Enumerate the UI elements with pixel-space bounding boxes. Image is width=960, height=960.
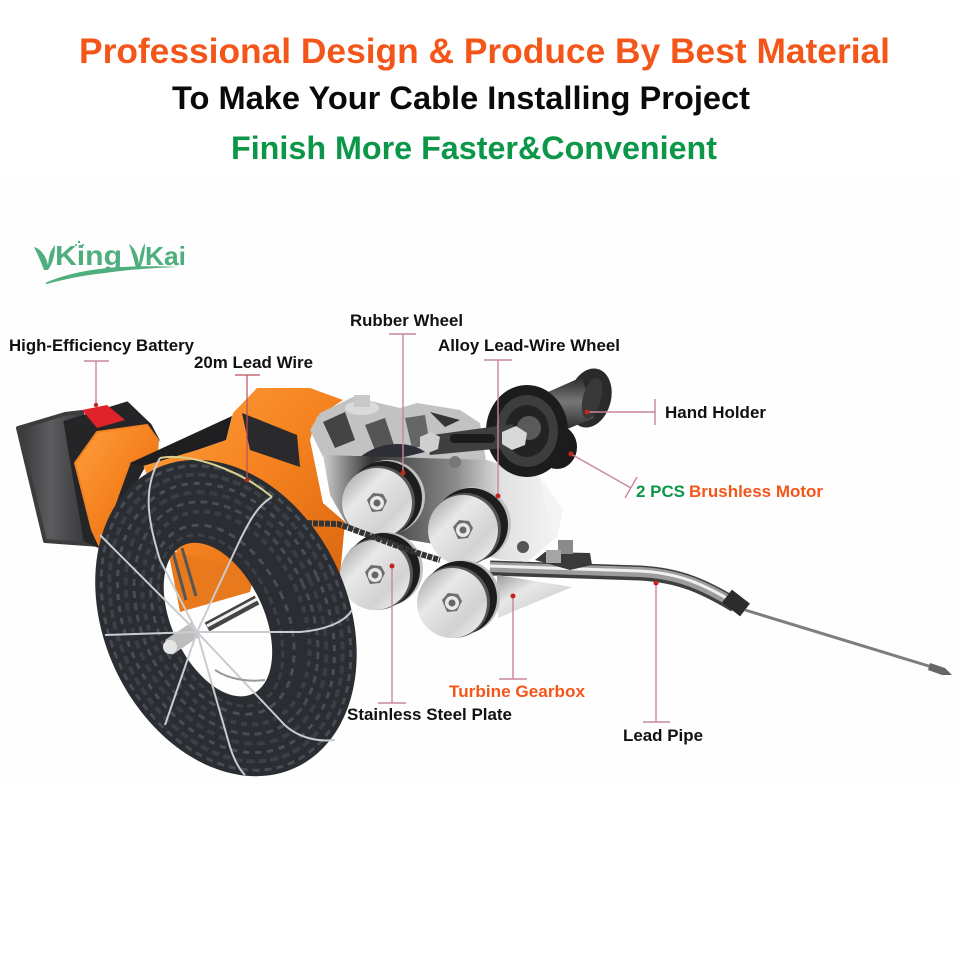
tool body illustration bbox=[18, 364, 952, 675]
callout: High-Efficiency Battery: High-Efficiency Battery bbox=[9, 336, 195, 355]
callout: Stainless Steel Plate: Stainless Steel Plate bbox=[347, 705, 512, 724]
callout: Alloy Lead-Wire Wheel bbox=[438, 336, 620, 498]
callout: 20m Lead Wire bbox=[194, 353, 313, 482]
wire frame bbox=[100, 457, 352, 775]
callout: Lead Pipe bbox=[623, 580, 703, 745]
pulley disc bbox=[486, 385, 568, 477]
callout: Alloy Lead-Wire Wheel: Alloy Lead-Wire Wheel bbox=[438, 336, 620, 355]
callout: Rubber Wheel bbox=[350, 311, 463, 476]
wire coil bbox=[46, 417, 406, 819]
lead wire through wheels bbox=[301, 523, 440, 560]
link arm bbox=[420, 424, 527, 455]
logo: King Kai bbox=[34, 240, 186, 284]
battery pack bbox=[18, 403, 158, 547]
gearbox mounting bracket bbox=[535, 540, 592, 570]
callout: 2 PCS Brushless Motor: 2 PCS bbox=[636, 482, 685, 501]
logo: King Kai: King bbox=[55, 240, 122, 271]
title: line three: Finish More Faster&Convenient bbox=[231, 130, 717, 166]
callout: Hand Holder bbox=[584, 399, 766, 425]
callout: Stainless Steel Plate bbox=[347, 564, 512, 724]
callout: 2 PCS Brushless Motor: Brushless Motor bbox=[689, 482, 823, 501]
callout: Lead Pipe: Lead Pipe bbox=[623, 726, 703, 745]
clamp housing bbox=[310, 395, 487, 467]
lead pipe bbox=[490, 566, 952, 675]
icon: red battery button bbox=[82, 405, 125, 428]
callout: High-Efficiency Battery bbox=[9, 336, 195, 407]
gear plate bbox=[323, 455, 563, 562]
coil hub spindle bbox=[163, 599, 257, 655]
brushless motor bbox=[537, 425, 577, 469]
title: line one: Professional Design & Produce By Best Material bbox=[79, 32, 890, 71]
callout: Rubber Wheel: Rubber Wheel bbox=[350, 311, 463, 330]
gearbox cone bbox=[497, 575, 572, 618]
callout: 20m Lead Wire: 20m Lead Wire bbox=[194, 353, 313, 372]
callout: Hand Holder: Hand Holder bbox=[665, 403, 766, 422]
title: line two: To Make Your Cable Installing Project bbox=[172, 80, 750, 116]
callout: 2 PCS Brushless Motor bbox=[568, 452, 823, 501]
callout: Turbine Gearbox bbox=[449, 594, 586, 701]
pulley wheels bbox=[340, 460, 511, 638]
logo: King Kai: Kai bbox=[145, 241, 186, 271]
callout: Turbine Gearbox: Turbine Gearbox bbox=[449, 682, 586, 701]
handle bbox=[548, 364, 618, 432]
drill body bbox=[130, 388, 345, 612]
